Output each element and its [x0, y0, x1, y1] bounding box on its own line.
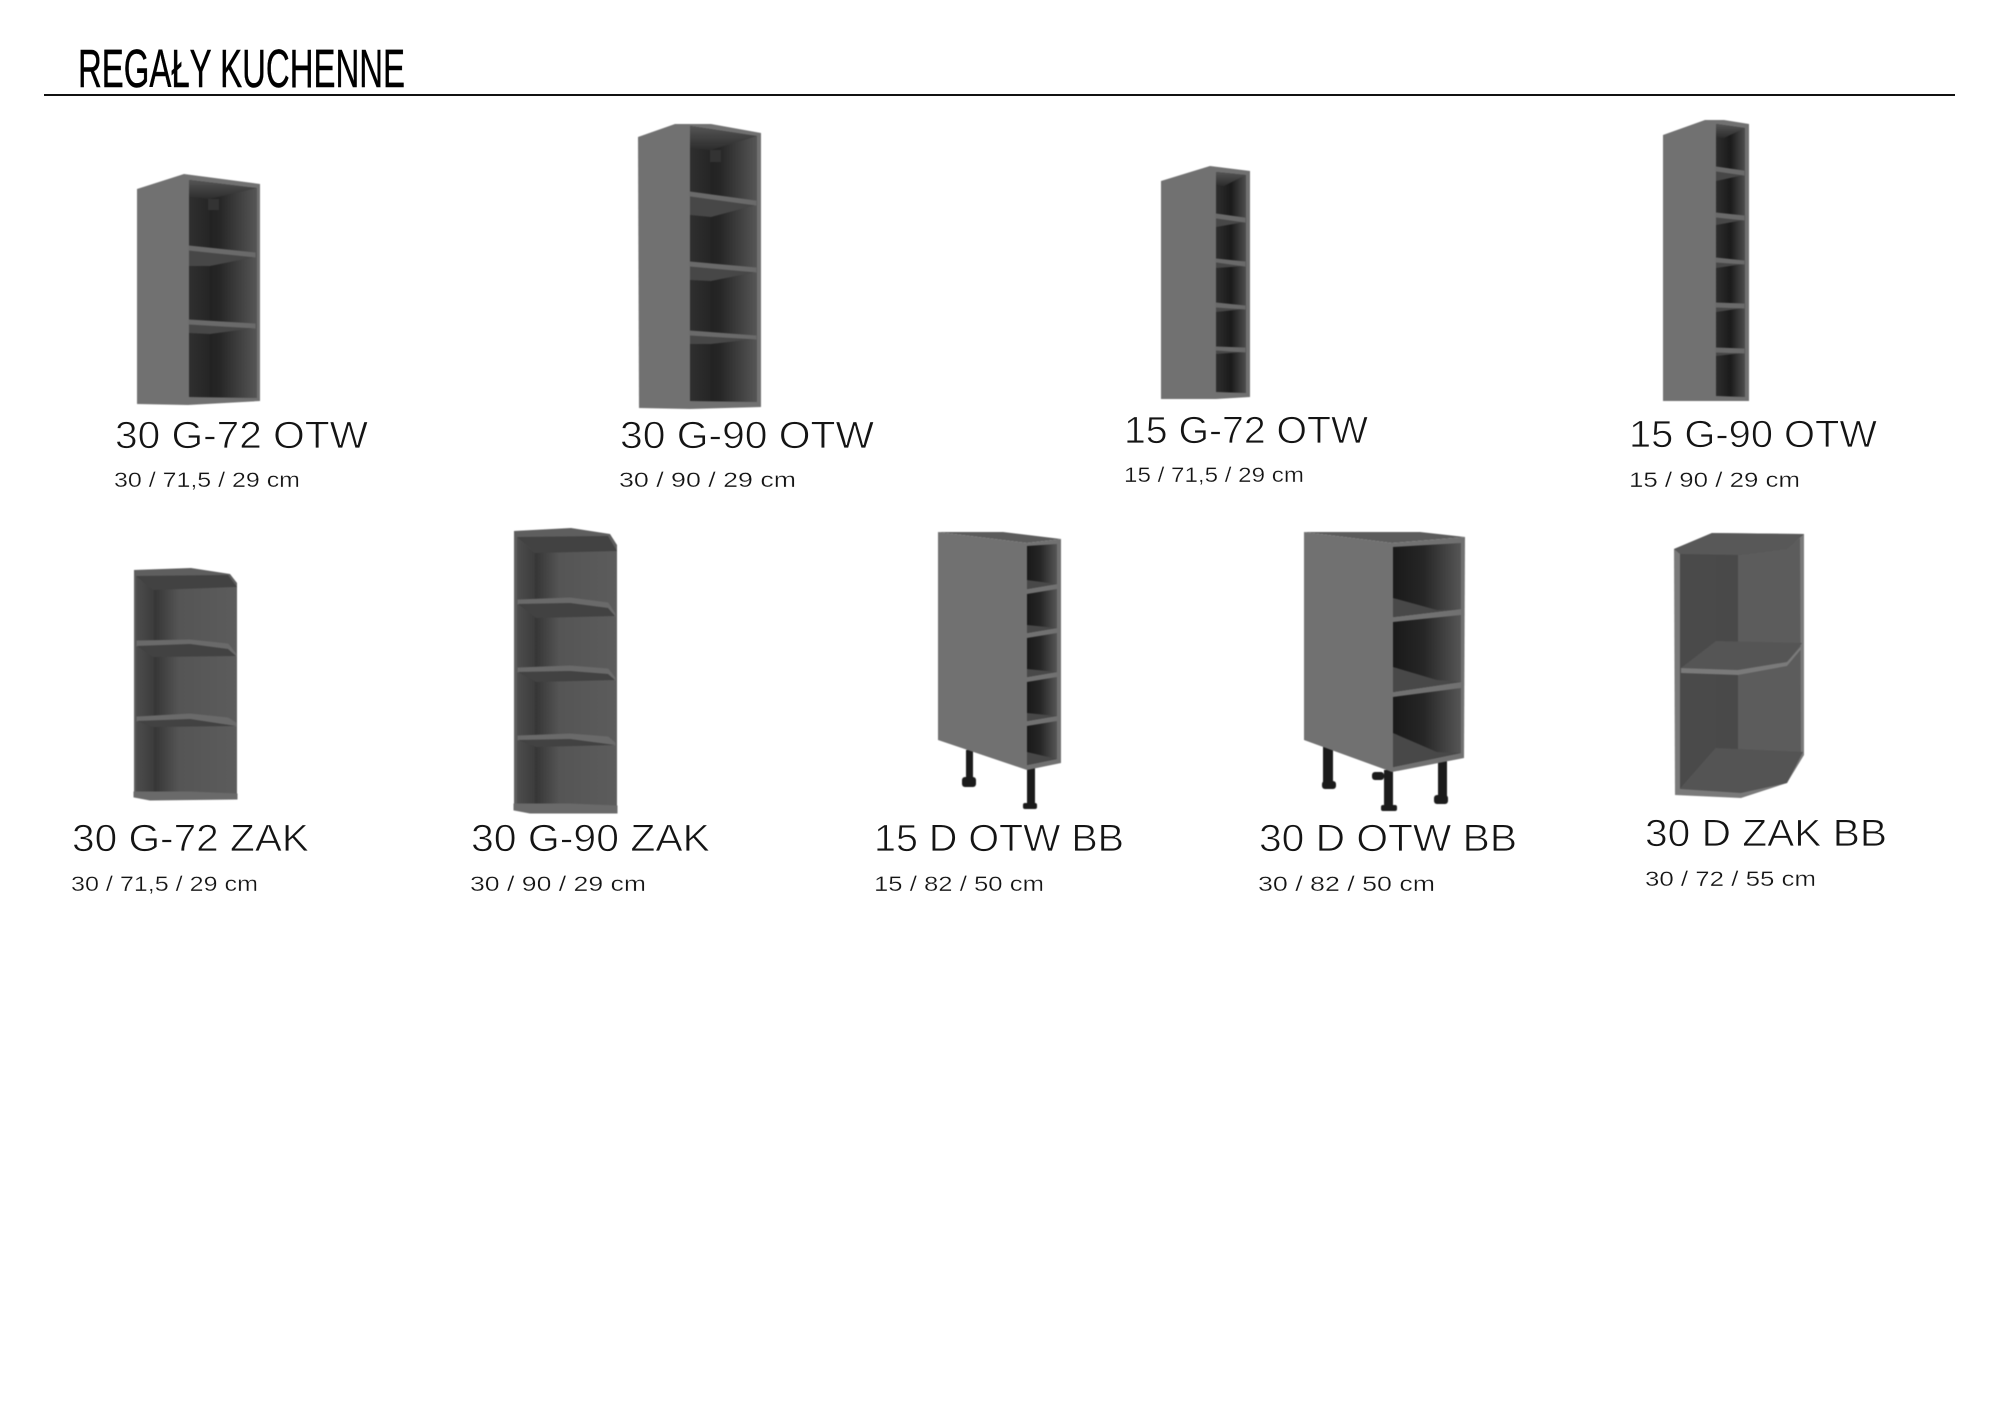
cabinet: 30 G-90 ZAK	[514, 528, 617, 813]
label: 30 G-90 OTW	[619, 415, 874, 492]
label: 30 G-90 OTW: 30 G-90 OTW	[620, 415, 874, 457]
label: 15 D OTW BB	[874, 818, 1124, 896]
label: 30 D ZAK BB: 30 / 72 / 55 cm	[1645, 868, 1816, 891]
cabinet: 15 G-72 OTW	[1161, 166, 1250, 399]
label: 30 G-90 ZAK: 30 / 90 / 29 cm	[470, 873, 646, 896]
label: 15 G-90 OTW: 15 G-90 OTW	[1629, 414, 1877, 456]
cabinet: 30 G-90 OTW	[638, 124, 761, 409]
label: 30 G-72 OTW: 30 / 71,5 / 29 cm	[114, 469, 300, 492]
title: REGAŁY KUCHENNE	[78, 39, 405, 99]
label: 30 G-90 ZAK: 30 G-90 ZAK	[471, 818, 710, 860]
label: 15 G-90 OTW	[1629, 414, 1877, 492]
header rule	[44, 94, 1955, 96]
label: 30 G-72 ZAK: 30 / 71,5 / 29 cm	[71, 873, 258, 896]
cabinet: 30 G-72 ZAK	[134, 568, 237, 800]
label: 30 G-90 OTW: 30 / 90 / 29 cm	[619, 469, 796, 492]
cabinet: 30 D OTW BB	[1304, 532, 1465, 811]
label: 30 G-72 ZAK	[71, 818, 309, 896]
label: 30 D OTW BB	[1258, 818, 1517, 896]
label: 15 G-90 OTW: 15 / 90 / 29 cm	[1629, 469, 1800, 492]
cabinet: 30 D ZAK BB	[1674, 533, 1804, 798]
label: 30 D ZAK BB: 30 D ZAK BB	[1645, 813, 1887, 855]
label: 30 G-72 OTW	[114, 415, 368, 492]
label: 15 D OTW BB: 15 / 82 / 50 cm	[874, 873, 1044, 896]
label: 15 G-72 OTW: 15 G-72 OTW	[1124, 410, 1368, 452]
cabinet: 30 G-72 OTW	[137, 174, 260, 405]
label: 30 D ZAK BB	[1645, 813, 1887, 891]
label: 30 G-72 ZAK: 30 G-72 ZAK	[72, 818, 309, 860]
label: 30 G-90 ZAK	[470, 818, 710, 896]
label: 15 G-72 OTW	[1124, 410, 1368, 487]
label: 30 D OTW BB: 30 / 82 / 50 cm	[1258, 873, 1435, 896]
label: 15 D OTW BB: 15 D OTW BB	[874, 818, 1124, 860]
cabinet: 15 D OTW BB	[938, 532, 1061, 809]
label: 30 G-72 OTW: 30 G-72 OTW	[115, 415, 368, 457]
cabinet: 15 G-90 OTW	[1663, 120, 1749, 401]
label: 30 D OTW BB: 30 D OTW BB	[1259, 818, 1517, 860]
label: 15 G-72 OTW: 15 / 71,5 / 29 cm	[1124, 464, 1304, 487]
